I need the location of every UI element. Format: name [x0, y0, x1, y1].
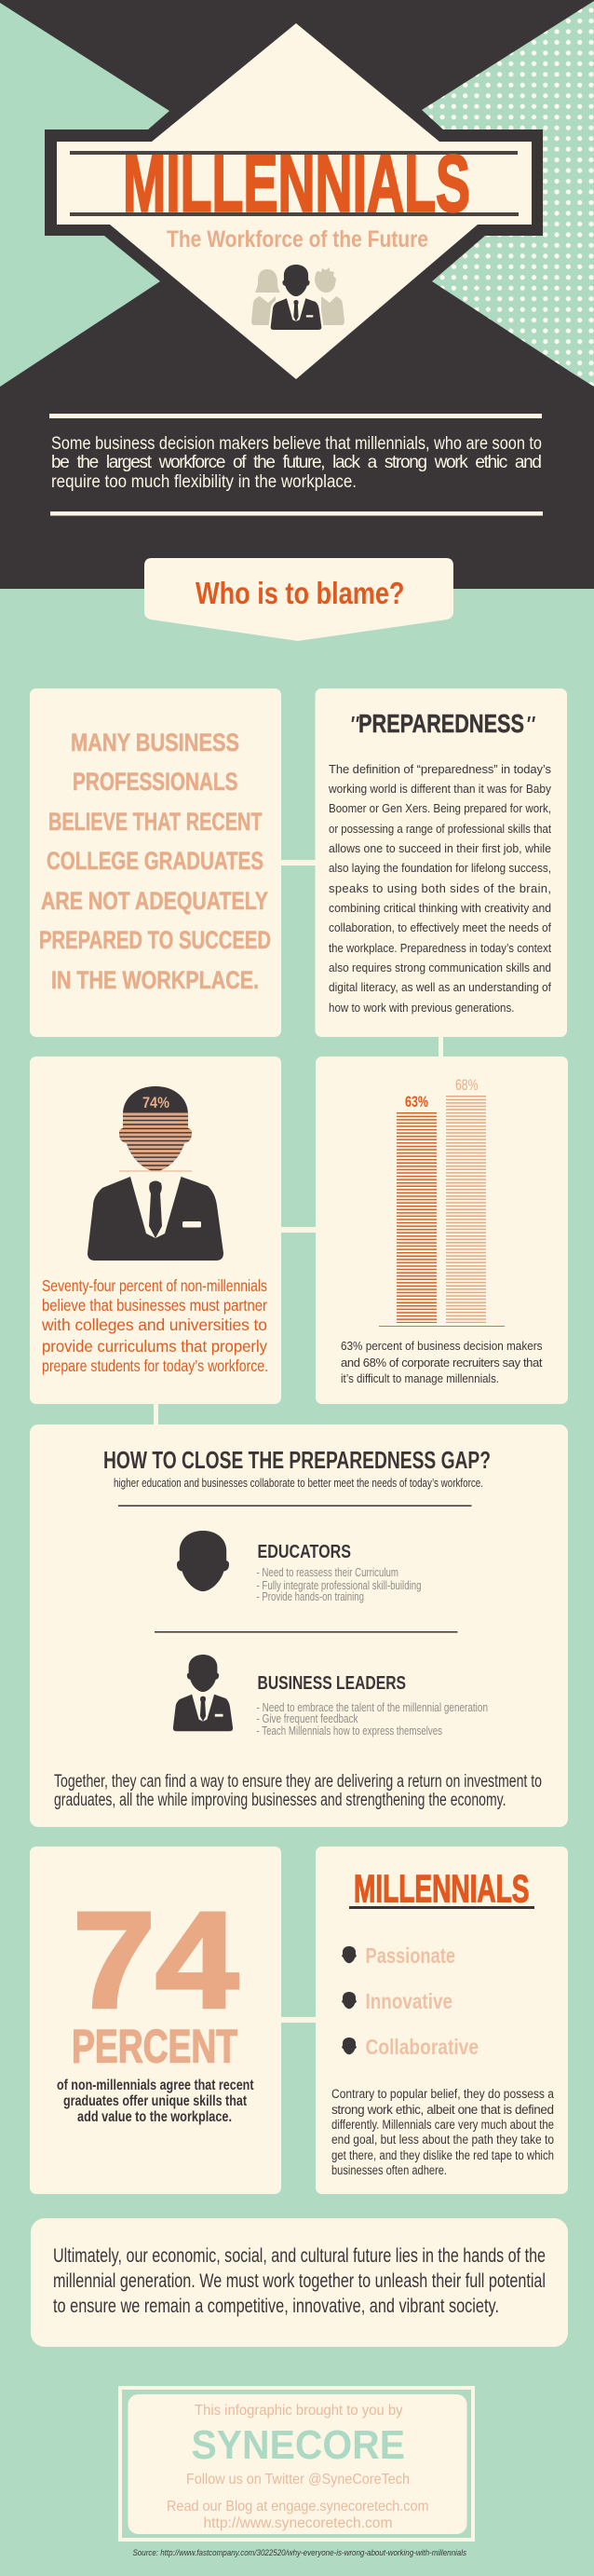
icon: business leader — [173, 1655, 233, 1731]
together text — [54, 1772, 542, 1810]
icon: three business people — [251, 265, 344, 330]
intro text: be the largest workforce of the future, lack a strong work ethic and — [51, 453, 542, 472]
traits paragraph: businesses often adhere. — [331, 2163, 447, 2177]
caption: with colleges and universities to — [41, 1315, 267, 1334]
preparedness paragraph: or possessing a range of professional skills that — [329, 822, 551, 836]
panel: 74 percent statistic — [30, 1847, 281, 2194]
chart caption: and 68% of corporate recruiters say that — [341, 1356, 543, 1370]
educators text: - Provide hands-on training — [257, 1589, 364, 1603]
educators text: EDUCATORS — [257, 1542, 351, 1562]
heading tag: who is to blame: Who is to blame? — [196, 576, 404, 610]
chart caption — [341, 1339, 543, 1385]
business leaders text: - Teach Millennials how to express themselves — [257, 1724, 442, 1738]
bar chart: 63% — [405, 1093, 428, 1111]
preparedness paragraph: combining critical thinking with creativity and — [329, 901, 551, 915]
trait: innovative: Innovative — [365, 1989, 452, 2013]
statement text: PROFESSIONALS — [73, 768, 238, 796]
diamond — [57, 23, 532, 379]
preparedness paragraph: working world is different than it was for Baby — [328, 782, 551, 796]
statistic caption — [57, 2078, 254, 2125]
trait: passionate — [342, 1943, 455, 1968]
panel: preparedness — [315, 688, 567, 1037]
educators text — [257, 1542, 421, 1603]
panel: bar chart — [316, 1056, 568, 1404]
header panel — [0, 0, 594, 589]
educators text: - Fully integrate professional skill-building — [257, 1578, 421, 1592]
preparedness heading: " — [349, 711, 359, 740]
gap subheading: higher education and businesses collaborate to better meet the needs of today’s workforce. — [114, 1477, 483, 1490]
statement text — [39, 729, 271, 994]
bar chart: 68% — [455, 1076, 479, 1094]
preparedness paragraph: how to work with previous generations. — [329, 1001, 514, 1015]
connectors — [154, 860, 443, 2023]
bar chart — [379, 1076, 505, 1327]
blog line: Read our Blog at engage.synecoretech.com — [167, 2499, 428, 2515]
banner rule top — [70, 151, 518, 155]
subtitle: The Workforce of the Future — [167, 226, 428, 252]
traits paragraph: get there, and they dislike the red tape to which — [331, 2148, 554, 2162]
left green shape — [0, 3, 169, 387]
chart caption: 63% percent of business decision makers — [341, 1339, 543, 1353]
trait: collaborative: Collaborative — [365, 2035, 479, 2059]
caption — [41, 1276, 268, 1375]
panel: millennials traits — [316, 1847, 568, 2194]
preparedness heading: PREPAREDNESS — [358, 709, 524, 738]
preparedness paragraph: allows one to succeed in their first job, while — [329, 841, 551, 855]
business leaders text: - Need to embrace the talent of the millennial generation — [257, 1700, 488, 1714]
traits paragraph: strong work ethic, albeit one that is defined — [331, 2103, 554, 2117]
preparedness paragraph: speaks to using both sides of the brain, — [329, 881, 551, 895]
caption: prepare students for today’s workforce. — [42, 1356, 268, 1375]
credit line: This infographic brought to you by — [195, 2403, 402, 2419]
preparedness paragraph: also laying the foundation for lifelong success, — [329, 861, 551, 875]
statement text: IN THE WORKPLACE. — [51, 966, 259, 994]
educators text: - Need to reassess their Curriculum — [257, 1565, 398, 1579]
statistic caption: add value to the workplace. — [77, 2109, 232, 2125]
preparedness paragraph: collaboration, to effectively meet the needs of — [329, 920, 551, 934]
banner rule bottom — [70, 212, 519, 216]
footer credits box — [120, 2388, 473, 2540]
business leaders text: - Give frequent feedback — [257, 1711, 358, 1725]
icon: person with 74 percent fill: 74% — [142, 1094, 169, 1111]
icon: person with 74 percent fill — [88, 1086, 223, 1261]
preparedness paragraph: the workplace. Preparedness in today’s context — [329, 941, 551, 955]
traits paragraph: Contrary to popular belief, they do possess a — [331, 2087, 554, 2101]
intro block — [49, 414, 543, 516]
preparedness paragraph: Boomer or Gen Xers. Being prepared for work, — [329, 801, 551, 815]
traits paragraph: end goal, but less about the path they take to — [331, 2133, 554, 2147]
panel: conclusion — [31, 2218, 568, 2347]
banner frame — [45, 129, 543, 236]
intro text: require too much flexibility in the workplace. — [51, 472, 357, 492]
preparedness paragraph — [328, 762, 551, 1015]
statement text: MANY BUSINESS — [71, 729, 239, 756]
website line: http://www.synecoretech.com — [203, 2515, 393, 2531]
preparedness paragraph: The definition of “preparedness” in today’s — [329, 762, 551, 776]
business leaders text — [257, 1673, 488, 1738]
caption: believe that businesses must partner — [42, 1296, 267, 1315]
big number: 74 — [73, 1884, 238, 2037]
business leaders text: BUSINESS LEADERS — [257, 1673, 406, 1694]
caption: provide curriculums that properly — [42, 1337, 267, 1356]
heading tag: who is to blame — [144, 558, 453, 641]
chart caption: it’s difficult to manage millennials. — [341, 1371, 499, 1385]
statement text: BELIEVE THAT RECENT — [48, 808, 263, 836]
statement text: ARE NOT ADEQUATELY — [41, 887, 268, 915]
icon: educator head — [177, 1531, 229, 1591]
twitter line: Follow us on Twitter @SyneCoreTech — [186, 2472, 410, 2487]
preparedness paragraph: also requires strong communication skills and — [329, 961, 551, 975]
preparedness paragraph: digital literacy, as well as an understanding of — [329, 980, 551, 994]
source line: Source: http://www.fastcompany.com/3022520/why-everyone-is-wrong-about-working-with-millennials — [132, 2548, 466, 2558]
brand name: SYNECORE — [192, 2422, 405, 2468]
preparedness heading: " — [525, 711, 535, 740]
statement text: COLLEGE GRADUATES — [47, 847, 263, 875]
right dotted shape — [422, 1, 594, 387]
conclusion text — [53, 2245, 546, 2317]
traits paragraph: differently. Millennials care very much about the — [331, 2118, 554, 2132]
trait: passionate: Passionate — [365, 1943, 455, 1968]
panel: 74 percent person — [30, 1056, 281, 1404]
statement text: PREPARED TO SUCCEED — [39, 926, 271, 954]
statistic caption: graduates offer unique skills that — [63, 2093, 248, 2109]
percent: PERCENT — [72, 2020, 237, 2072]
trait: innovative — [342, 1989, 452, 2013]
traits paragraph — [331, 2087, 554, 2177]
panel: how to close the preparedness gap — [30, 1424, 568, 1827]
intro text — [51, 434, 542, 492]
statistic caption: of non-millennials agree that recent — [57, 2078, 254, 2093]
caption: Seventy-four percent of non-millennials — [42, 1276, 267, 1295]
panel: many business professionals — [30, 688, 281, 1037]
